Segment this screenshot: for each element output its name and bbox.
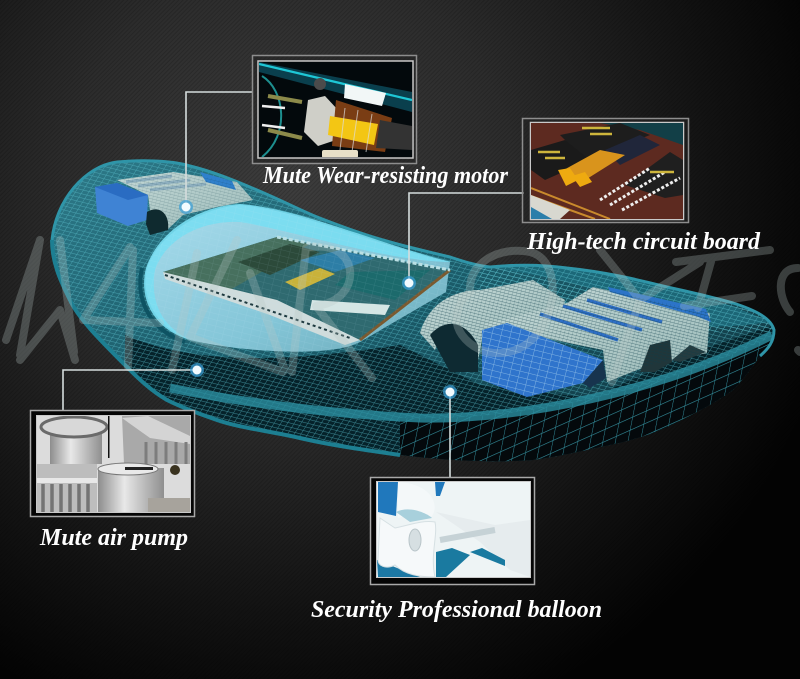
shell rim (52, 161, 774, 356)
label: Mute Wear-resisting motor: Mute Wear-resisting motor (262, 163, 509, 189)
shell body with mesh (54, 162, 772, 462)
circuit board in shell (163, 237, 450, 345)
dark arch (146, 209, 168, 235)
panel: balloon photo (370, 478, 534, 584)
grey housing (117, 172, 253, 230)
panel: circuit board photo (522, 118, 688, 222)
glowing dome recess (140, 204, 452, 352)
teal rim band (170, 335, 772, 418)
blue cube (95, 183, 148, 226)
label: Mute air pump: Mute air pump (39, 525, 188, 551)
label: Security Professional balloon: Security Professional balloon (311, 597, 602, 623)
label: High-tech circuit board: High-tech circuit board (526, 229, 761, 255)
left motor block (95, 172, 253, 235)
dark fine-mesh underside (125, 325, 775, 470)
right upper cavity (490, 266, 770, 327)
blue cube (482, 323, 603, 397)
callout: air pump connector (63, 363, 204, 412)
panel: motor photo (252, 56, 416, 164)
grey block (482, 287, 710, 382)
callout: balloon connector (443, 385, 457, 479)
right motor block (420, 280, 711, 397)
callout: circuit board connector (402, 193, 524, 290)
watermark strokes (6, 240, 800, 382)
panel: air pump photo (30, 410, 194, 516)
large mesh under rim band (400, 335, 775, 470)
arch housing (420, 280, 565, 360)
insole shell (40, 150, 790, 470)
callout: motor connector (179, 92, 252, 214)
